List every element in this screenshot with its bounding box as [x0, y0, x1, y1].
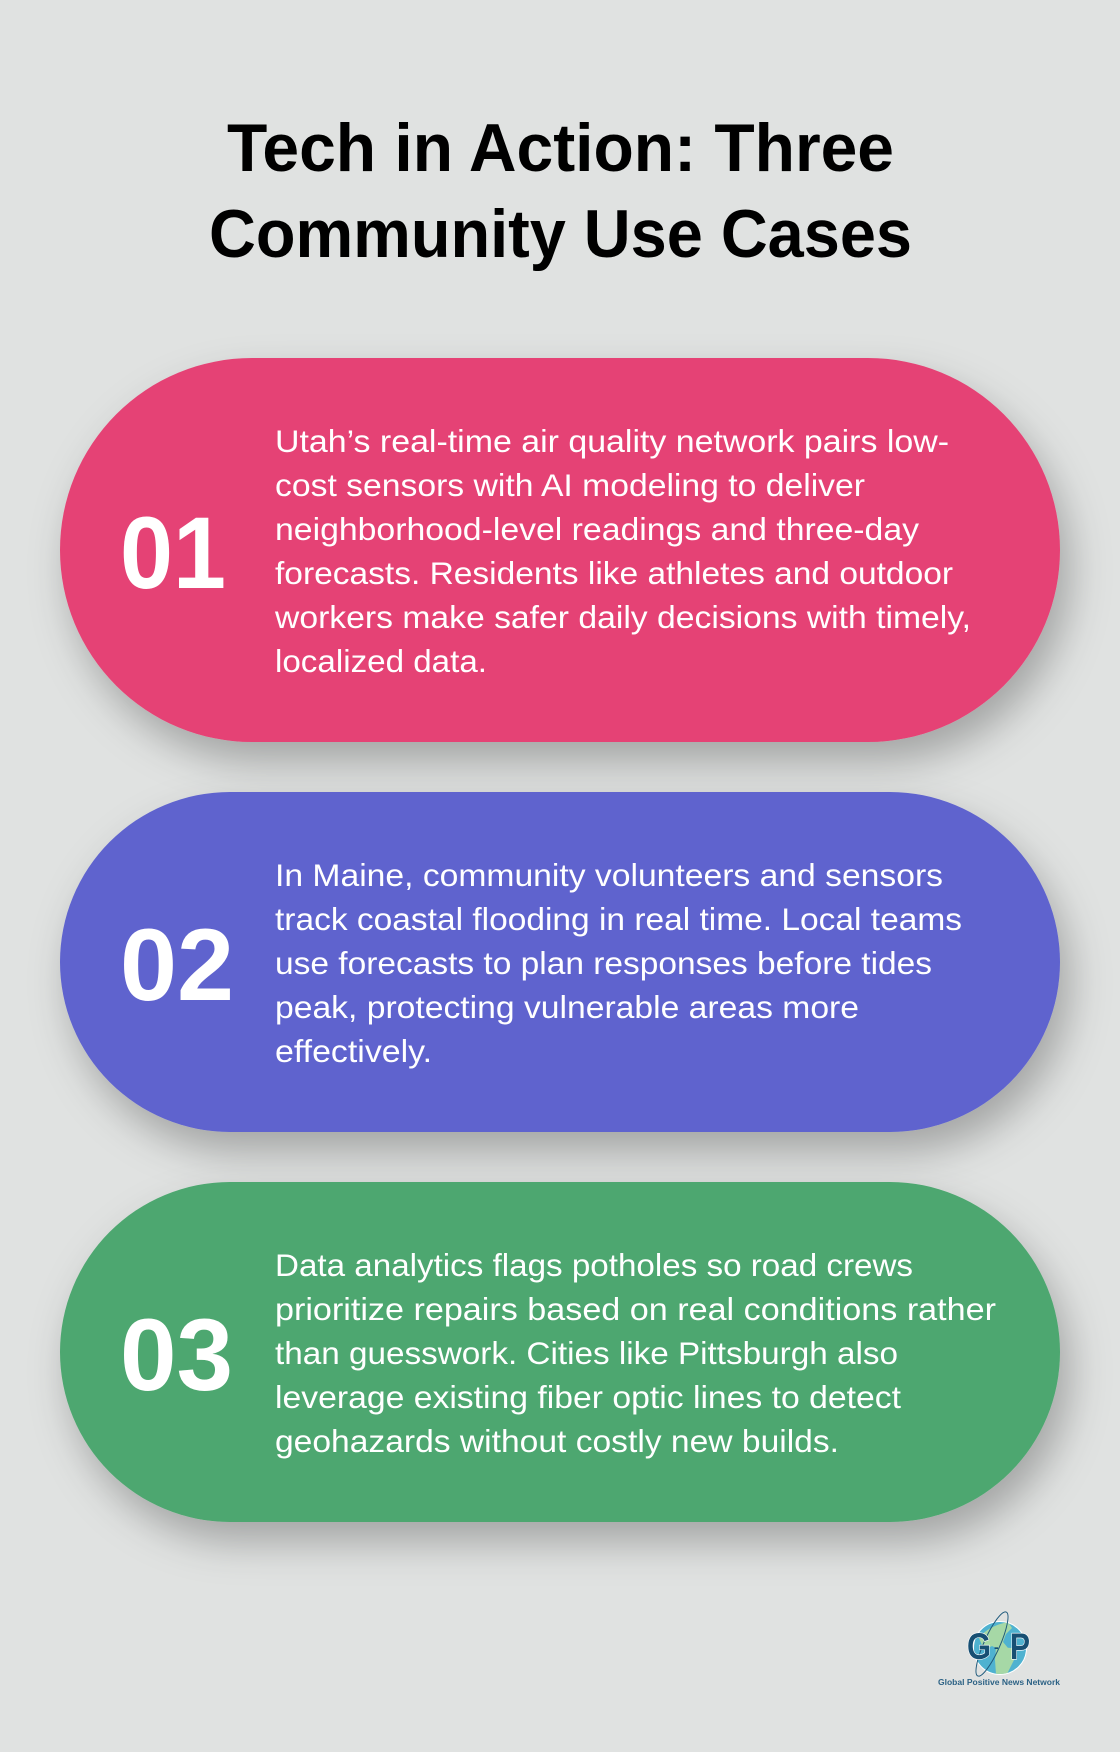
logo wordmark: Global Positive News Network [938, 1677, 1060, 1687]
logo: Global Positive News Network [938, 1609, 1060, 1687]
text block: data analytics and fiber: leverage existing fiber optic lines to detect [275, 1379, 901, 1415]
panel: use case 02 [60, 792, 1060, 1132]
text block: Utah air quality: Utah’s real-time air quality network pairs low- [275, 423, 949, 459]
logo letters G-P [967, 1626, 1030, 1667]
text block: Utah air quality [274, 423, 971, 679]
text block: Utah air quality: cost sensors with AI modeling to deliver [275, 467, 865, 503]
title [209, 110, 912, 272]
text block: data analytics and fiber: than guesswork. Cities like Pittsburgh also [275, 1335, 898, 1371]
title: Community Use Cases [209, 196, 912, 272]
text block: Maine coastal flooding: use forecasts to plan responses before tides [275, 945, 932, 981]
text block: data analytics and fiber: geohazards without costly new builds. [275, 1423, 839, 1459]
text block: data analytics and fiber: Data analytics flags potholes so road crews [275, 1247, 913, 1283]
number 02: 02 [120, 908, 234, 1022]
panel: use case 03 [60, 1182, 1060, 1522]
logo letters G-P: G [967, 1626, 991, 1667]
text block: Maine coastal flooding [275, 857, 962, 1069]
panel: use case 01 [60, 358, 1060, 742]
text block: Maine coastal flooding: In Maine, community volunteers and sensors [275, 857, 943, 893]
text block: Maine coastal flooding: effectively. [275, 1033, 432, 1069]
text block: Maine coastal flooding: peak, protecting vulnerable areas more [275, 989, 859, 1025]
title: Tech in Action: Three [227, 110, 894, 186]
logo letters G-P: - [994, 1639, 999, 1655]
logo letters G-P: P [1010, 1626, 1030, 1667]
text block: data analytics and fiber: prioritize repairs based on real conditions rather [275, 1291, 996, 1327]
text block: Utah air quality: workers make safer daily decisions with timely, [274, 599, 971, 635]
text block: data analytics and fiber [275, 1247, 996, 1459]
text block: Utah air quality: forecasts. Residents like athletes and outdoor [275, 555, 953, 591]
icon: globe [970, 1609, 1026, 1679]
text block: Maine coastal flooding: track coastal flooding in real time. Local teams [275, 901, 962, 937]
text block: Utah air quality: neighborhood-level readings and three-day [275, 511, 919, 547]
number 03: 03 [120, 1298, 233, 1412]
number 01: 01 [120, 496, 226, 610]
text block: Utah air quality: localized data. [275, 643, 487, 679]
